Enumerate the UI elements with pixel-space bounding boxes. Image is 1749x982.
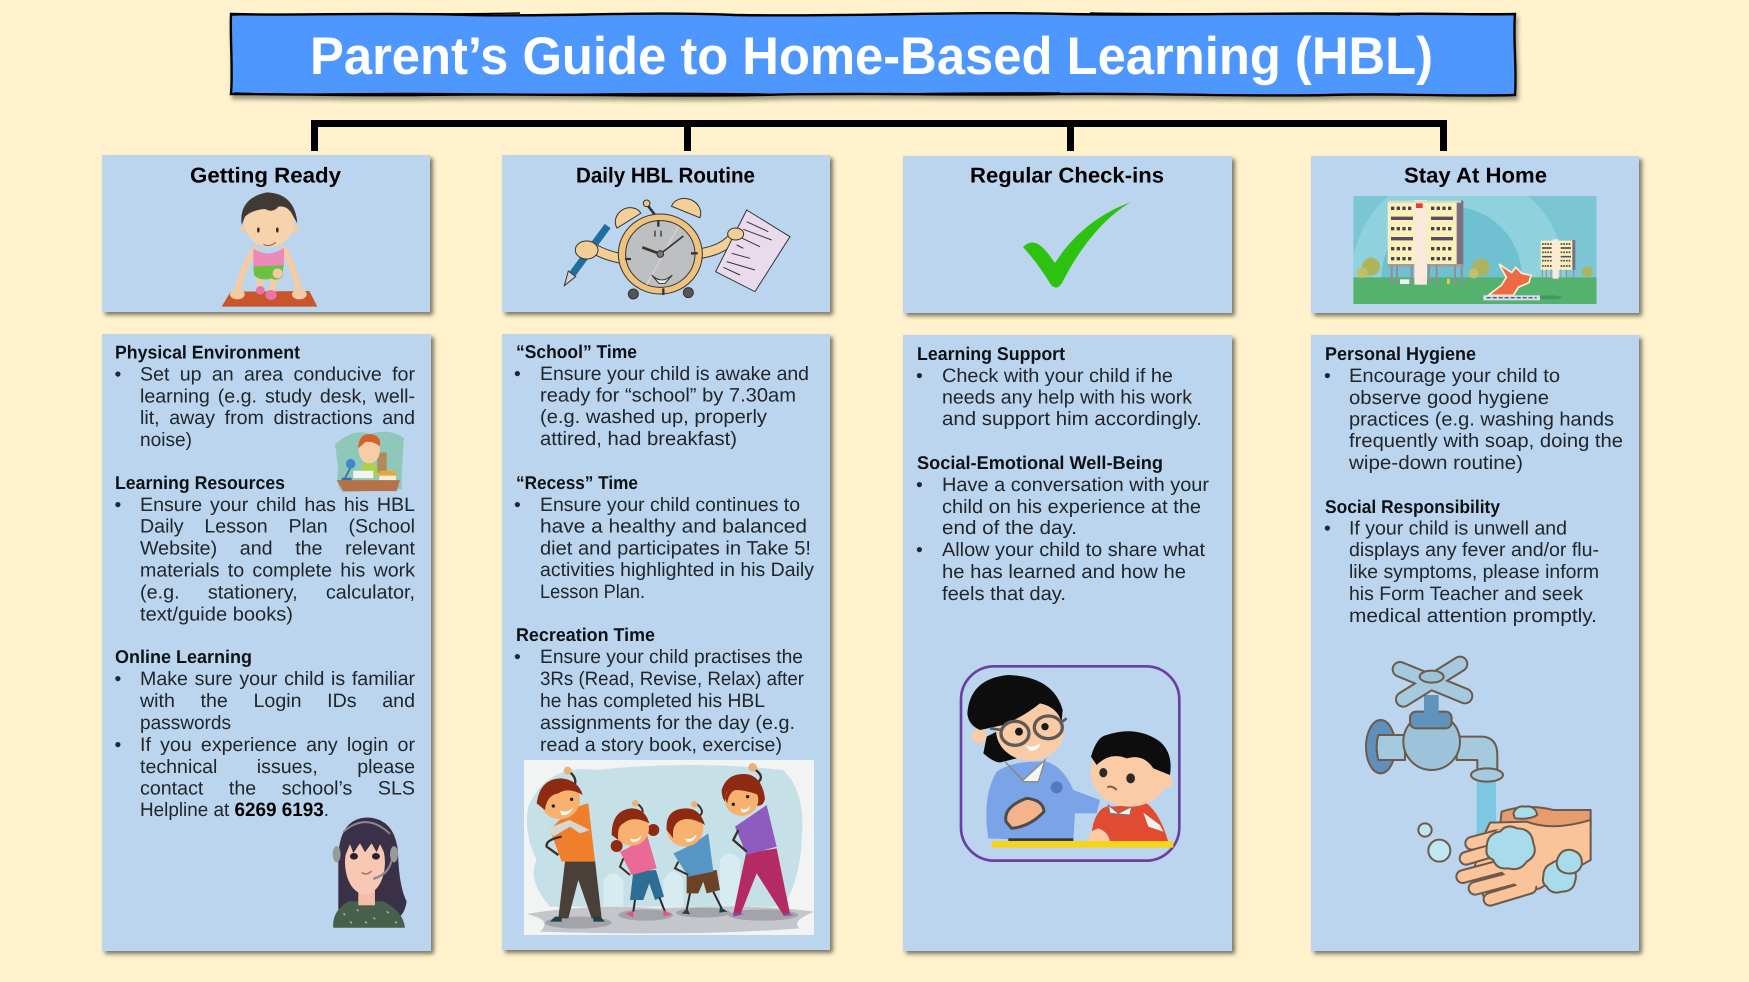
text block: social-emotional well-being: • (916, 539, 923, 561)
connector bracket (314, 124, 1444, 151)
boy (687, 870, 720, 893)
panel: getting ready header (102, 155, 430, 312)
heading: stay at home: Stay At Home (1404, 164, 1547, 188)
text block: recreation time: • (514, 646, 521, 668)
icon: housing blocks scene (1353, 196, 1597, 304)
text block: social responsibility: his Form Teacher and seek (1349, 583, 1583, 605)
illustration: tap and hand washing (1366, 664, 1591, 903)
text block: online learning (114, 646, 416, 821)
text block: personal hygiene: practices (e.g. washing hands (1349, 408, 1614, 430)
panel: daily routine body (502, 334, 830, 950)
text block: recess time: diet and participates in Take 5! (540, 538, 811, 560)
text block: social-emotional well-being: feels that day. (942, 583, 1066, 605)
text block: school time: (e.g. washed up, properly (540, 406, 767, 428)
icon: boy on mat (222, 192, 317, 307)
panel: stay at home body (1311, 335, 1639, 951)
mom (733, 848, 790, 915)
panel: daily routine header (502, 155, 830, 312)
text block: online learning: passwords (140, 712, 231, 734)
panel: stay at home header (1311, 156, 1645, 319)
icon: green check mark (1023, 202, 1131, 288)
text block: physical environment: Physical Environment (115, 342, 300, 362)
text block: social-emotional well-being: end of the day. (942, 517, 1077, 539)
icon: alarm clock with pen and paper (564, 194, 790, 299)
text block: learning support (916, 343, 1202, 430)
panel: regular check-ins body (903, 335, 1232, 951)
text block: learning resources: Ensure your child has his HBL (140, 494, 415, 516)
text block: recess time: have a healthy and balanced (540, 516, 807, 538)
text block: social-emotional well-being: he has learned and how he (942, 561, 1186, 583)
text block: physical environment: learning (e.g. study desk, well- (140, 386, 415, 408)
text block: social-emotional well-being: • (916, 474, 923, 496)
text block: physical environment: Set up an area conducive for (140, 364, 416, 386)
text block: personal hygiene: • (1324, 365, 1331, 387)
title banner (231, 13, 1516, 96)
text block: social responsibility: like symptoms, please inform (1349, 561, 1599, 583)
heading: daily hbl routine: Daily HBL Routine (576, 164, 755, 188)
text block: online learning: contact the school’s SLS (140, 778, 415, 800)
text block: social responsibility: Social Responsibility (1325, 496, 1501, 517)
text block: personal hygiene: Personal Hygiene (1325, 343, 1476, 364)
text block: social responsibility: If your child is unwell and (1349, 518, 1567, 540)
text block: learning resources: Website) and the relevant (140, 538, 416, 560)
text block: social responsibility: displays any fever and/or flu- (1349, 539, 1599, 561)
text block: physical environment: lit, away from distractions and (140, 407, 415, 429)
text block: social-emotional well-being: Allow your child to share what (942, 539, 1206, 561)
text block: school time: attired, had breakfast) (540, 428, 737, 450)
icon: child at study desk (335, 432, 404, 492)
text block: learning resources (114, 472, 416, 626)
text block: online learning: If you experience any login or (140, 734, 416, 756)
panel: getting ready body (102, 334, 431, 951)
text block: recreation time: Ensure your child practises the (540, 646, 803, 668)
heading: regular check-ins: Regular Check-ins (970, 164, 1164, 188)
text block: learning resources: Daily Lesson Plan (School (140, 516, 415, 538)
icon: helpline operator with headset (333, 818, 407, 928)
text block: learning support: • (916, 365, 923, 387)
dad (558, 860, 602, 918)
text block: physical environment: • (114, 364, 122, 386)
heading: getting ready: Getting Ready (190, 164, 341, 188)
text block: social-emotional well-being (916, 452, 1210, 605)
text block: online learning: Make sure your child is familiar (140, 668, 416, 690)
text block: school time: “School” Time (516, 341, 637, 362)
text block: online learning: • (114, 734, 122, 756)
text block: social responsibility: medical attention promptly. (1349, 605, 1597, 627)
text block: recess time: Ensure your child continues to (540, 494, 800, 516)
girl (630, 870, 664, 900)
text block: recreation time: assignments for the day (e.g. (540, 712, 795, 734)
text block: recreation time (514, 624, 805, 756)
title text: Parent’s Guide to Home-Based Learning (HBL) (310, 27, 1433, 86)
text block: learning resources: materials to complete his work (140, 560, 415, 582)
text block: online learning: Online Learning (115, 646, 252, 667)
text block: learning support: and support him accordingly. (942, 408, 1202, 430)
text block: social-emotional well-being: child on his experience at the (942, 496, 1201, 518)
text block: learning resources: (e.g. stationery, calculator, (140, 582, 415, 604)
text block: learning resources: text/guide books) (140, 604, 293, 626)
text block: school time (514, 341, 809, 450)
text block: physical environment: noise) (140, 429, 192, 451)
text block: online learning: • (114, 668, 122, 690)
text block: physical environment (114, 342, 416, 451)
text block: learning support: Check with your child if he (942, 365, 1173, 387)
text block: recess time (514, 472, 814, 603)
text block: social-emotional well-being: Social-Emotional Well-Being (917, 452, 1163, 473)
text block: recreation time: Recreation Time (516, 624, 655, 645)
panel: regular check-ins header (903, 156, 1232, 313)
text block: personal hygiene (1324, 343, 1623, 474)
text block: learning support: needs any help with his work (942, 386, 1192, 408)
text block: social responsibility (1324, 496, 1599, 627)
text block: online learning: with the Login IDs and (139, 690, 415, 712)
text block: recess time: Lesson Plan. (540, 581, 645, 603)
text block: learning resources: • (114, 494, 122, 516)
text block: school time: ready for “school” by 7.30am (540, 384, 796, 406)
text block: school time: Ensure your child is awake and (540, 363, 809, 385)
text block: recreation time: read a story book, exercise) (540, 734, 782, 756)
text block: personal hygiene: frequently with soap, doing the (1349, 430, 1623, 452)
text block: learning support: Learning Support (917, 343, 1065, 364)
text block: personal hygiene: Encourage your child to (1349, 365, 1560, 387)
illustration: family stretching (524, 760, 814, 935)
text block: school time: • (514, 363, 521, 385)
text block: recess time: activities highlighted in his Daily (540, 559, 814, 581)
text block: learning resources: Learning Resources (115, 472, 285, 493)
illustration: teacher with pupil (961, 666, 1179, 861)
text block: social responsibility: • (1324, 518, 1331, 540)
text block: recreation time: he has completed his HBL (540, 690, 765, 712)
text block: recess time: “Recess” Time (516, 472, 638, 493)
text block: personal hygiene: wipe-down routine) (1348, 452, 1523, 474)
text block: personal hygiene: observe good hygiene (1349, 387, 1549, 409)
text block: recess time: • (514, 494, 521, 516)
text block: online learning: technical issues, please (140, 756, 415, 778)
text block: online learning: Helpline at 6269 6193. (140, 799, 329, 821)
text block: social-emotional well-being: Have a conversation with your (942, 474, 1210, 496)
text block: recreation time: 3Rs (Read, Revise, Relax) after (540, 668, 805, 690)
